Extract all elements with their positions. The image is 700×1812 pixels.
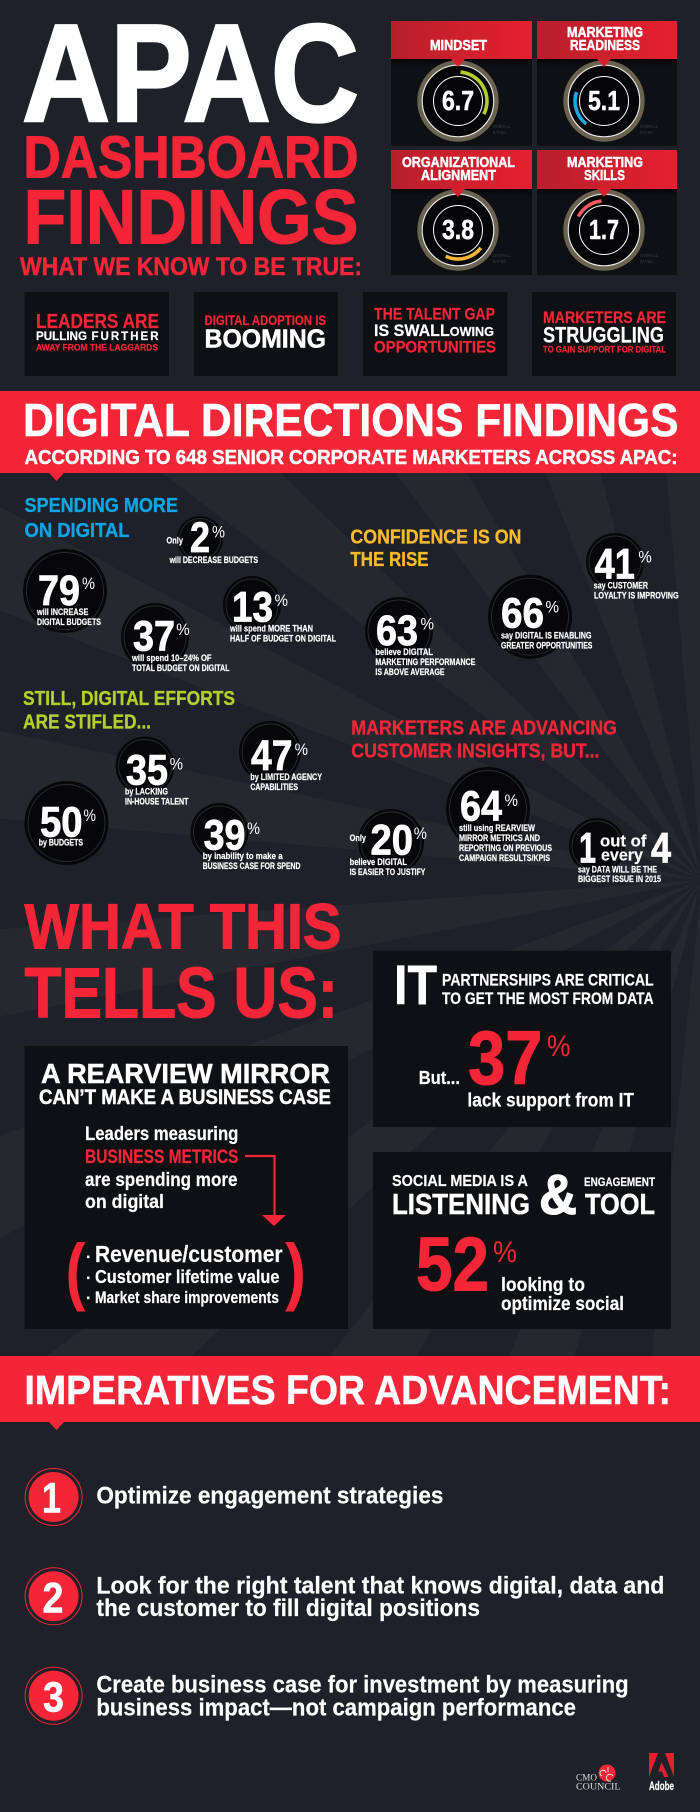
panel: leaders are pulling further — [24, 292, 169, 376]
panel: mindset gauge — [391, 21, 532, 146]
panel: marketing readiness gauge: MARKETING — [567, 25, 643, 41]
heading: still, digital efforts are stifled: ARE STIFLED... — [23, 711, 151, 733]
panel: organizational alignment gauge: ORGANIZATIONAL — [402, 155, 515, 171]
imperative 1: Optimize engagement strategies — [96, 1482, 443, 1509]
logo: CMO Council — [576, 1764, 621, 1792]
stat: 50 percent — [24, 781, 108, 865]
stat: 41 percent: say CUSTOMER — [594, 580, 648, 590]
logo: Adobe: Adobe — [649, 1781, 674, 1793]
heading: marketers are advancing customer insights — [351, 717, 617, 763]
panel: leaders are pulling further: LEADERS ARE — [36, 311, 159, 333]
heading: marketers are advancing customer insights: CUSTOMER INSIGHTS, BUT... — [351, 741, 600, 763]
section: advancing customer insights — [350, 717, 671, 884]
stat: 66 percent — [488, 575, 592, 659]
panel: organizational alignment gauge: RATING — [493, 259, 506, 264]
heading: spending more on digital: ON DIGITAL — [24, 520, 130, 542]
panel: organizational alignment gauge: OVERALL — [493, 253, 511, 258]
banner: imperatives for advancement — [0, 1356, 700, 1430]
stat: 64 percent: % — [504, 791, 518, 810]
panel: IT partnerships — [373, 951, 671, 1127]
stat: 50 percent: % — [84, 806, 96, 825]
logo: CMO Council: CMO — [576, 1774, 597, 1784]
panel: marketers are struggling: STRUGGLING — [543, 322, 664, 348]
stat: 41 percent: 41 — [595, 540, 635, 588]
stat: 13 percent: HALF OF BUDGET ON DIGITAL — [230, 634, 336, 644]
panel: mindset gauge: RATING — [493, 130, 506, 135]
title: APAC Dashboard Findings: FINDINGS — [24, 174, 358, 260]
panel: rearview mirror — [24, 1046, 348, 1329]
stat: 20 percent: % — [414, 824, 427, 843]
panel: social media: ENGAGEMENT — [584, 1175, 656, 1189]
heading: still, digital efforts are stifled — [23, 688, 235, 733]
stat: 66 percent: GREATER OPPORTUNITIES — [501, 640, 592, 650]
heading: confidence is on the rise: THE RISE — [350, 549, 429, 571]
panel: digital adoption is booming — [194, 292, 338, 376]
stat: 1 out of every 4: 4 — [651, 825, 671, 873]
heading: what this tells us — [24, 890, 342, 1034]
stat: 39 percent: BUSINESS CASE FOR SPEND — [203, 861, 301, 871]
stat: 2 percent: will DECREASE BUDGETS — [169, 555, 258, 565]
heading: still, digital efforts are stifled: STILL, DIGITAL EFFORTS — [23, 688, 235, 710]
stat: 1 out of every 4: out of — [600, 832, 647, 851]
panel: IT partnerships: TO GET THE MOST FROM DATA — [442, 990, 654, 1008]
panel: leaders are pulling further: FURTHER — [92, 331, 159, 343]
heading: confidence is on the rise — [350, 526, 521, 571]
stat: 39 percent: % — [247, 819, 260, 838]
panel: social media: % — [493, 1236, 517, 1269]
panel: marketing readiness gauge: OVERALL — [640, 124, 658, 129]
heading: spending more on digital: SPENDING MORE — [24, 495, 178, 517]
stat: 50 percent: by BUDGETS — [39, 838, 83, 848]
stat: 2 percent: Only — [166, 536, 183, 546]
stat: 47 percent: by LIMITED AGENCY — [250, 772, 322, 782]
stat: 1 out of every 4: say DATA WILL BE THE — [578, 864, 657, 874]
section: digital efforts are stifled — [23, 688, 322, 871]
text: leaders measuring business metrics: are spending more — [85, 1170, 238, 1191]
stat: 47 percent — [239, 721, 322, 792]
panel: leaders are pulling further: AWAY FROM THE LAGGARDS — [36, 342, 158, 354]
panel: marketing readiness gauge — [537, 21, 677, 146]
panel: the talent gap: OPPORTUNITIES — [374, 339, 496, 357]
stat: 35 percent: IN-HOUSE TALENT — [125, 796, 189, 806]
panel: marketers are struggling: MARKETERS ARE — [543, 309, 666, 327]
stat: 37 percent: TOTAL BUDGET ON DIGITAL — [132, 663, 230, 673]
list: business metrics: ( — [66, 1229, 86, 1312]
stat: 63 percent: % — [420, 614, 434, 633]
stat: 39 percent — [190, 803, 301, 871]
panel: marketing readiness gauge: 5.1 — [588, 85, 620, 116]
panel: marketers are struggling — [532, 292, 676, 376]
text: leaders measuring business metrics: Leaders measuring — [85, 1124, 238, 1145]
stat: 63 percent: MARKETING PERFORMANCE — [375, 657, 475, 667]
title: APAC Dashboard Findings: WHAT WE KNOW TO BE TRUE: — [20, 253, 362, 281]
imperative 3: business impact—not campaign performance — [96, 1695, 576, 1722]
title: APAC Dashboard Findings — [20, 0, 362, 281]
stat: 20 percent — [350, 809, 427, 877]
panel: social media: looking to — [501, 1275, 585, 1296]
list: business metrics: · — [86, 1249, 91, 1266]
stat: 2 percent — [166, 514, 258, 565]
stat: 2 percent: 2 — [190, 514, 210, 562]
list: business metrics — [66, 1229, 306, 1312]
stat: 64 percent: 64 — [460, 783, 502, 831]
panel: rearview mirror: CAN’T MAKE A BUSINESS CASE — [39, 1086, 331, 1109]
panel: marketing readiness gauge: RATING — [640, 130, 653, 135]
stat: 20 percent: Only — [350, 833, 366, 843]
panel: IT partnerships: But... — [419, 1068, 460, 1088]
section: spending more on digital — [23, 495, 336, 673]
panel: social media: LISTENING — [392, 1189, 530, 1221]
panel: organizational alignment gauge: 3.8 — [442, 214, 474, 245]
panel: marketing skills gauge: MARKETING — [567, 155, 643, 171]
panel: mindset gauge: MINDSET — [430, 38, 487, 54]
list: business metrics: Revenue/customer — [95, 1241, 283, 1267]
stat: 37 percent: % — [176, 620, 190, 639]
stat: 63 percent: believe DIGITAL — [375, 647, 433, 657]
stat: 1 out of every 4: BIGGEST ISSUE IN 2015 — [578, 874, 661, 884]
stat: 35 percent: by LACKING — [125, 786, 168, 796]
stat: 41 percent — [586, 533, 679, 600]
stat: 37 percent — [121, 603, 230, 673]
stat: 63 percent: IS ABOVE AVERAGE — [375, 667, 445, 677]
panel: mindset gauge: OVERALL — [493, 124, 511, 129]
panel: IT partnerships: % — [547, 1030, 570, 1063]
panel: marketing skills gauge: 1.7 — [589, 214, 619, 245]
panel: marketers are struggling: TO GAIN SUPPORT FOR DIGITAL — [543, 345, 666, 356]
stat: 63 percent — [365, 597, 475, 677]
stat: 64 percent: REPORTING ON PREVIOUS — [459, 843, 552, 853]
imperative 1 — [25, 1468, 443, 1526]
text: leaders measuring business metrics: BUSINESS METRICS — [85, 1147, 238, 1168]
panel: marketing skills gauge: RATING — [640, 259, 653, 264]
list: business metrics: Customer lifetime value — [95, 1266, 280, 1287]
stat: 64 percent: still using REARVIEW — [459, 823, 535, 833]
imperative 2: the customer to fill digital positions — [96, 1595, 480, 1622]
stat: 79 percent: will INCREASE — [36, 607, 88, 617]
heading: marketers are advancing customer insights: MARKETERS ARE ADVANCING — [351, 717, 617, 739]
stat: 50 percent: 50 — [40, 799, 83, 847]
stat: 47 percent: 47 — [251, 732, 292, 780]
stat: 20 percent: believe DIGITAL — [350, 857, 407, 867]
stat: 79 percent: 79 — [38, 567, 80, 615]
logo: Adobe — [649, 1753, 674, 1793]
stat: 64 percent: CAMPAIGN RESULTS/KPIS — [459, 853, 550, 863]
imperative 3: Create business case for investment by measuring — [96, 1671, 629, 1698]
list: business metrics: · — [86, 1290, 91, 1307]
stat: 39 percent: 39 — [204, 811, 246, 859]
stat: 64 percent — [446, 767, 552, 863]
imperative 3: 3 — [43, 1674, 64, 1722]
imperative 2 — [25, 1568, 664, 1625]
panel: marketing readiness gauge: READINESS — [570, 38, 640, 54]
text: leaders measuring business metrics: on digital — [85, 1192, 164, 1213]
stat: 1 out of every 4: every — [601, 846, 644, 865]
stat: 1 out of every 4 — [569, 818, 671, 884]
stat: 37 percent: 37 — [133, 613, 175, 661]
title: APAC Dashboard Findings: DASHBOARD — [24, 124, 358, 190]
panel: IT partnerships: IT — [394, 953, 437, 1016]
banner: digital directions findings — [0, 391, 700, 481]
stat: 13 percent — [223, 576, 336, 644]
stat: 41 percent: LOYALTY IS IMPROVING — [594, 590, 679, 600]
panel: marketing skills gauge: SKILLS — [584, 168, 625, 184]
panel: IT partnerships: 37 — [468, 1016, 542, 1101]
arrow: metrics down to list — [245, 1156, 286, 1226]
panel: the talent gap — [363, 292, 508, 376]
imperative 2: Look for the right talent that knows digital, data and — [96, 1572, 664, 1599]
stat: 66 percent: say DIGITAL IS ENABLING — [501, 630, 592, 640]
panel: leaders are pulling further: PULLING — [36, 331, 87, 343]
heading: confidence is on the rise: CONFIDENCE IS ON — [350, 526, 521, 548]
panel: digital adoption is booming: DIGITAL ADOPTION IS — [204, 313, 326, 328]
stat: 13 percent: will spend MORE THAN — [229, 624, 313, 634]
imperative 2: 2 — [42, 1574, 64, 1622]
stat: 79 percent — [23, 549, 107, 633]
stat: 20 percent: 20 — [370, 816, 413, 864]
imperative 3 — [25, 1667, 629, 1724]
stat: 37 percent: will spend 10–24% OF — [131, 653, 212, 663]
stat: 47 percent: CAPABILITIES — [250, 782, 298, 792]
title: APAC Dashboard Findings: APAC — [22, 0, 359, 151]
panel: social media: 52 — [416, 1223, 489, 1308]
panel: organizational alignment gauge — [391, 150, 532, 275]
stat: 13 percent: % — [274, 591, 288, 610]
stat: 66 percent: 66 — [501, 590, 544, 638]
stat: 63 percent: 63 — [376, 607, 418, 655]
panel: IT partnerships: PARTNERSHIPS ARE CRITICAL — [442, 972, 654, 990]
panel: social media: & — [539, 1163, 577, 1227]
stat: 35 percent — [116, 736, 189, 806]
imperative 1: 1 — [42, 1475, 61, 1523]
text: leaders measuring business metrics — [85, 1124, 238, 1213]
logo: CMO Council: COUNCIL — [576, 1782, 621, 1792]
stat: 2 percent: % — [212, 523, 225, 542]
heading: what this tells us: TELLS US: — [24, 954, 338, 1034]
panel: social media: SOCIAL MEDIA IS A — [392, 1173, 528, 1190]
stat: 47 percent: % — [295, 740, 308, 759]
panel: IT partnerships: lack support from IT — [467, 1091, 634, 1112]
stat: 64 percent: MIRROR METRICS AND — [459, 833, 540, 843]
stat: 1 out of every 4: 1 — [579, 825, 596, 873]
panel: rearview mirror: A REARVIEW MIRROR — [41, 1058, 330, 1089]
panel: the talent gap: THE TALENT GAP — [374, 306, 495, 324]
panel: organizational alignment gauge: ALIGNMENT — [421, 168, 496, 184]
panel: marketing skills gauge — [537, 150, 677, 275]
heading: what this tells us: WHAT THIS — [24, 890, 342, 962]
stat: 79 percent: DIGITAL BUDGETS — [37, 617, 101, 627]
section: confidence is on the rise — [350, 526, 679, 677]
stat: 66 percent: % — [546, 598, 559, 617]
list: business metrics: · — [86, 1270, 91, 1287]
list: business metrics: ) — [285, 1229, 306, 1312]
list: business metrics: Market share improvements — [95, 1289, 279, 1307]
panel: digital adoption is booming: BOOMING — [204, 324, 326, 354]
stat: 79 percent: % — [82, 574, 95, 593]
panel: the talent gap: IS SWALLOWING — [374, 322, 494, 340]
heading: spending more on digital — [24, 495, 178, 542]
panel: social media: TOOL — [585, 1189, 655, 1221]
stat: 41 percent: % — [638, 548, 652, 567]
panel: social media: optimize social — [501, 1294, 624, 1315]
stat: 35 percent: 35 — [126, 746, 168, 794]
panel: marketing skills gauge: OVERALL — [640, 253, 658, 258]
stat: 39 percent: by inability to make a — [203, 851, 283, 861]
stat: 13 percent: 13 — [232, 584, 273, 632]
stat: 35 percent: % — [170, 754, 183, 773]
stat: 20 percent: IS EASIER TO JUSTIFY — [350, 867, 425, 877]
panel: social media — [373, 1152, 671, 1329]
panel: mindset gauge: 6.7 — [442, 85, 474, 116]
